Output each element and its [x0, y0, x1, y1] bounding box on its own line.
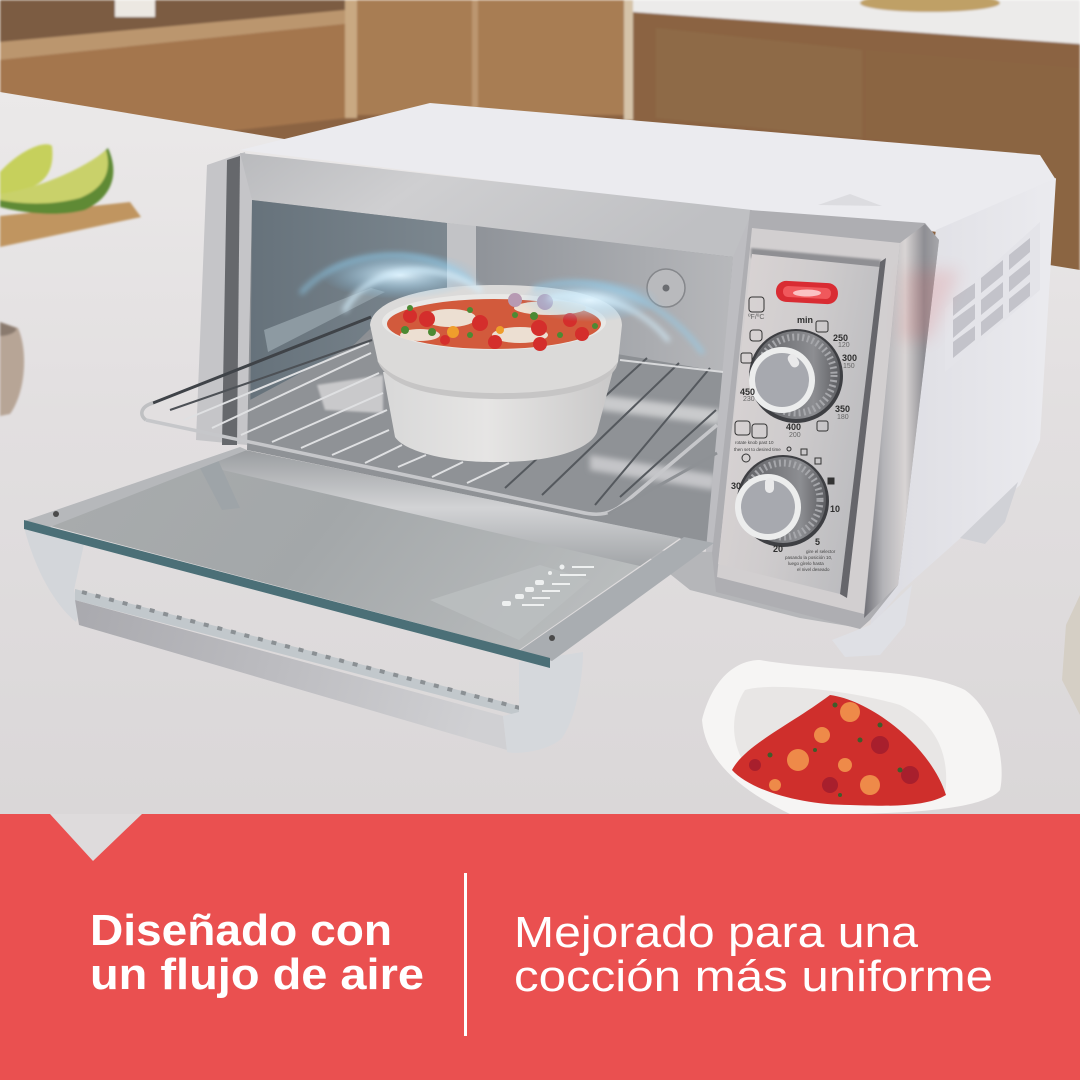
indicator light — [775, 280, 838, 305]
panel labels: 350 — [835, 404, 850, 414]
left door post — [196, 152, 252, 445]
panel labels: 300 — [842, 353, 857, 363]
countertop — [0, 92, 1080, 814]
side vents — [945, 222, 1040, 372]
door left arm — [24, 527, 84, 622]
top steel band — [240, 153, 752, 260]
subheading: Mejorado para una — [514, 908, 919, 957]
panel secondary labels: 180 — [837, 414, 849, 421]
subheading: cocción más uniforme — [514, 952, 993, 1001]
oven feet — [832, 585, 912, 657]
panel icons — [735, 297, 834, 484]
heading: Diseñado con — [90, 906, 392, 955]
oven right side — [870, 178, 1056, 628]
oven top — [240, 103, 1056, 232]
lower oven sill — [640, 550, 860, 628]
panel labels: 400 — [786, 422, 801, 432]
bowl with salsa — [370, 285, 622, 462]
background: kitchen shelves — [0, 0, 1080, 280]
towel at right edge — [1062, 595, 1080, 715]
panel labels: 250 — [833, 333, 848, 343]
panel labels — [731, 315, 857, 554]
panel labels: 20 — [773, 544, 783, 554]
panel labels: 10 — [830, 504, 840, 514]
door printed icons — [502, 564, 594, 606]
panel secondary labels: 150 — [843, 363, 855, 370]
door right arm — [503, 652, 583, 753]
panel instructions: el nivel deseado — [797, 567, 830, 572]
banner notch — [50, 814, 142, 861]
panel labels: 450 — [740, 387, 755, 397]
panel secondary labels: 200 — [789, 432, 801, 439]
panel secondary labels: ºF/ºC — [748, 314, 764, 321]
ceramic cup at left edge — [0, 322, 24, 416]
glass right rail — [519, 537, 714, 661]
door teeth strip — [75, 589, 520, 716]
panel instructions: gire el selector — [806, 549, 836, 554]
salsa in bowl — [387, 293, 601, 351]
glass left rail — [24, 447, 247, 527]
door bottom handle — [75, 600, 507, 750]
oven — [196, 103, 1056, 657]
temperature knob — [749, 329, 843, 423]
heading: un flujo de aire — [90, 950, 424, 999]
panel secondary labels — [743, 314, 855, 439]
reflection on glass — [205, 450, 680, 566]
red banner — [0, 814, 1080, 1080]
salsa side dish — [702, 660, 1002, 814]
open glass door — [24, 447, 714, 753]
timer knob — [735, 455, 829, 547]
panel instructions: then set to desired time — [734, 447, 781, 452]
oven cavity — [247, 200, 733, 545]
panel instructions — [734, 440, 836, 572]
panel labels: min — [797, 315, 813, 325]
post between cavity and controls — [705, 212, 752, 560]
panel instructions: rotate knob past 10 — [735, 440, 774, 445]
cavity round button — [647, 269, 685, 307]
panel labels: 30 — [731, 481, 741, 491]
panel secondary labels: 230 — [743, 396, 755, 403]
wire rack — [142, 317, 723, 514]
hot air swirl — [302, 251, 702, 352]
panel instructions: luego gírelo hasta — [788, 561, 824, 566]
panel labels: 5 — [815, 537, 820, 547]
panel secondary labels: 120 — [838, 342, 850, 349]
avocado on cutting board — [0, 144, 141, 247]
glass pane — [50, 450, 680, 650]
glass front edge — [24, 520, 550, 668]
control panel — [712, 210, 960, 629]
panel instructions: pasando la posición 10, — [785, 555, 832, 560]
